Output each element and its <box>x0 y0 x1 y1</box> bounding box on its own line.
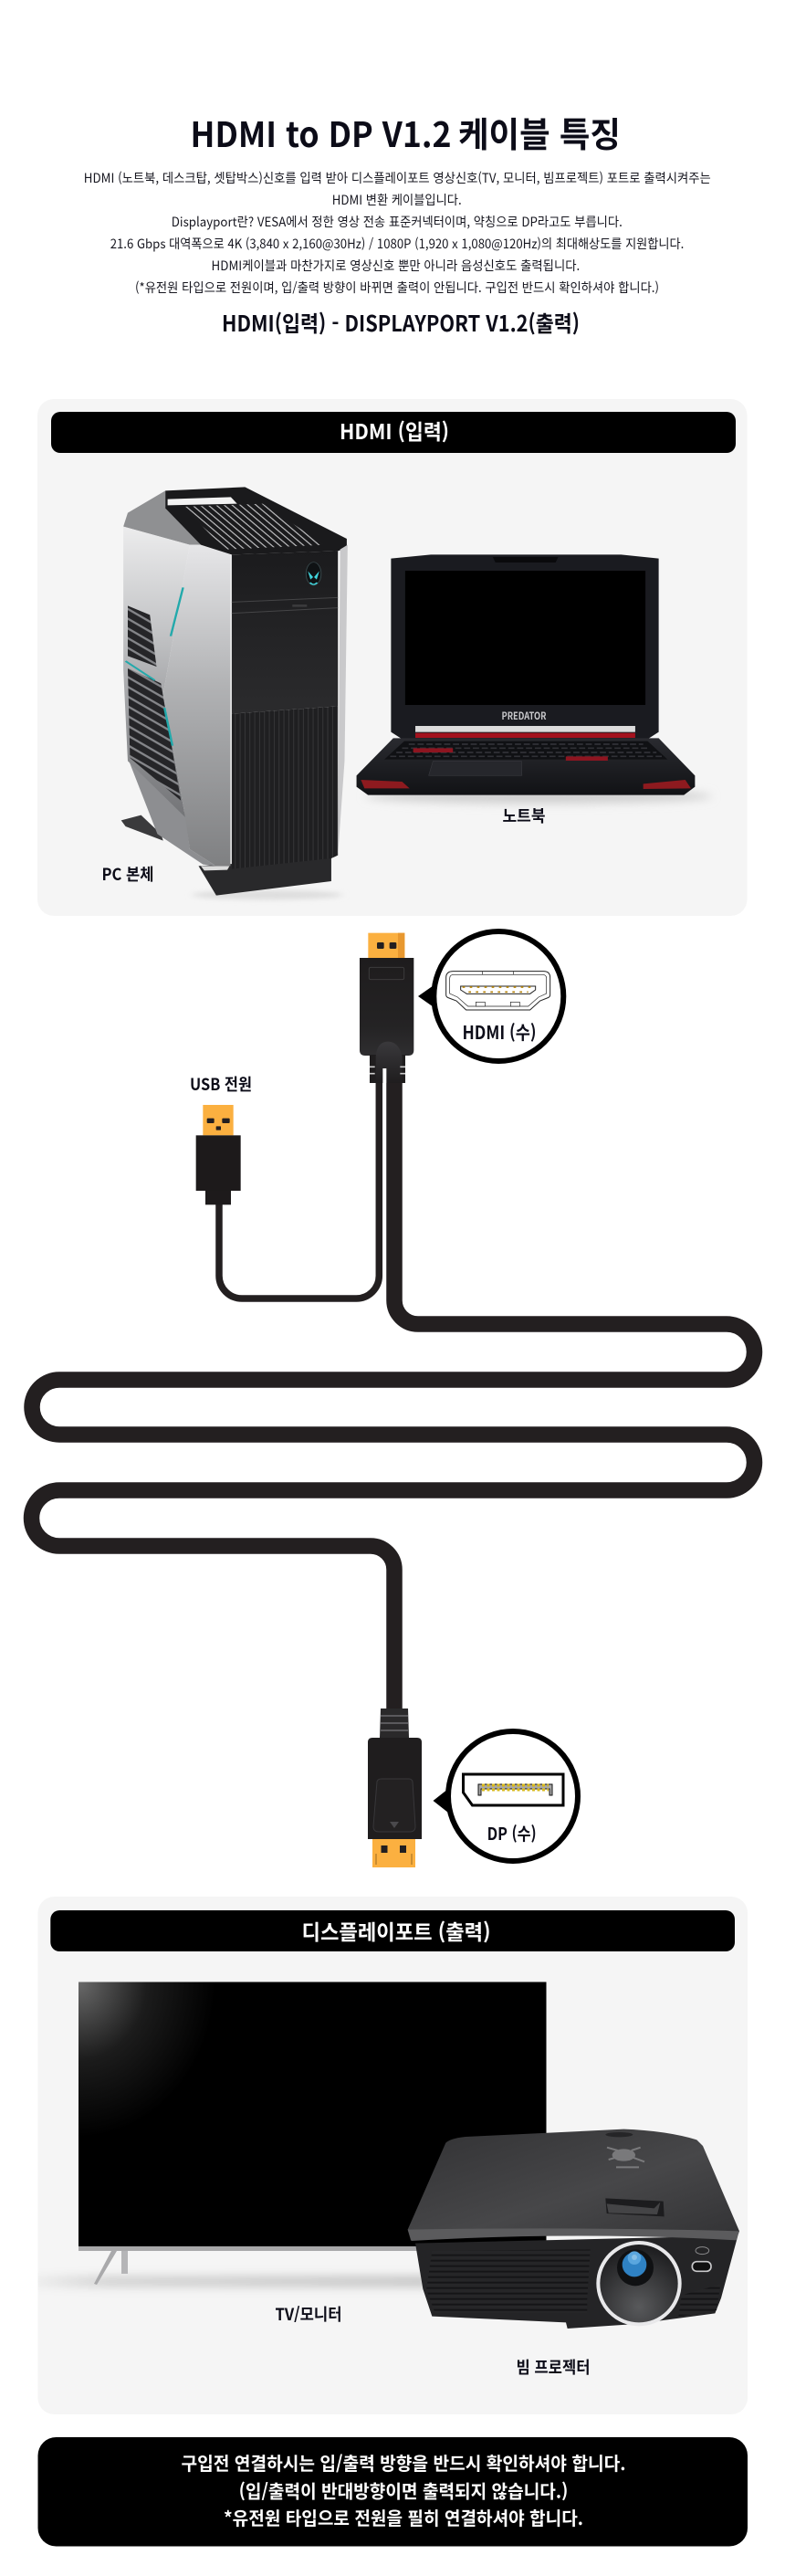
panel: HDMI input <box>37 399 747 916</box>
label: laptop: 노트북 <box>502 804 546 827</box>
description text block: HDMI (노트북, 데스크탑, 셋탑박스)신호를 입력 받아 디스플레이포트 영상신호(TV, 모니터, 빔프로젝트) 포트로 출력시켜주는 <box>84 169 711 187</box>
callout: purchase warning: 구입전 연결하시는 입/출력 방향을 반드시 확인하셔야 합니다. <box>181 2449 626 2476</box>
description text block: HDMI케이블과 마찬가지로 영상신호 뿐만 아니라 음성신호도 출력됩니다. <box>212 257 580 275</box>
DP plug <box>368 1709 422 1867</box>
callout: purchase warning <box>38 2437 748 2546</box>
label: beam projector: 빔 프로젝터 <box>517 2355 590 2379</box>
title <box>190 107 621 157</box>
description text block <box>84 169 711 297</box>
icon: laptop: PREDATOR <box>502 709 547 723</box>
header bar: DisplayPort output: 디스플레이포트 (출력) <box>301 1915 491 1946</box>
description text block: HDMI 변환 케이블입니다. <box>332 191 462 209</box>
callout: purchase warning: *유전원 타입으로 전원을 필히 연결하셔야 합니다. <box>224 2504 583 2530</box>
HDMI plug <box>360 933 413 1083</box>
icon: laptop <box>357 554 712 804</box>
icon: TV <box>27 1982 546 2287</box>
subtitle: HDMI(입력) - DISPLAYPORT V1.2(출력) <box>222 306 580 338</box>
header bar: HDMI input <box>51 412 736 453</box>
laptop shadow <box>365 789 712 804</box>
label: DP male: DP (수) <box>487 1821 537 1845</box>
label: PC: PC 본체 <box>102 862 153 886</box>
panel: DisplayPort output <box>27 1897 748 2414</box>
main cable <box>31 1083 754 1712</box>
label: USB power: USB 전원 <box>190 1072 252 1096</box>
cable assembly <box>31 933 754 1867</box>
description text block: Displayport란? VESA에서 정한 영상 전송 표준커넥터이며, 약칭으로 DP라고도 부릅니다. <box>172 213 623 231</box>
title: 케이블 특징 <box>458 107 621 157</box>
icon: projector <box>408 2129 739 2329</box>
callout: HDMI male connector <box>418 931 563 1061</box>
label: HDMI male: HDMI (수) <box>462 1018 537 1045</box>
USB plug <box>196 1105 241 1204</box>
callout: purchase warning: (입/출력이 반대방향이면 출력되지 않습니다.) <box>239 2476 568 2504</box>
title: HDMI to DP V1.2 <box>190 107 451 157</box>
icon: DP port <box>464 1774 563 1805</box>
header bar: DisplayPort output <box>50 1910 735 1951</box>
label: TV / monitor: TV/모니터 <box>276 2302 341 2326</box>
description text block: 21.6 Gbps 대역폭으로 4K (3,840 x 2,160@30Hz) / 1080P (1,920 x 1,080@120Hz)의 최대해상도를 지원합니다. <box>110 235 684 253</box>
callout: DP male connector <box>433 1731 578 1861</box>
icon: HDMI port <box>446 972 550 1010</box>
description text block: (*유전원 타입으로 전원이며, 입/출력 방향이 바뀌면 출력이 안됩니다. 구입전 반드시 확인하셔야 합니다.) <box>135 279 659 297</box>
icon: PC tower <box>121 487 348 899</box>
thin USB power cable <box>219 1083 379 1299</box>
header bar: HDMI input: HDMI (입력) <box>340 415 449 446</box>
